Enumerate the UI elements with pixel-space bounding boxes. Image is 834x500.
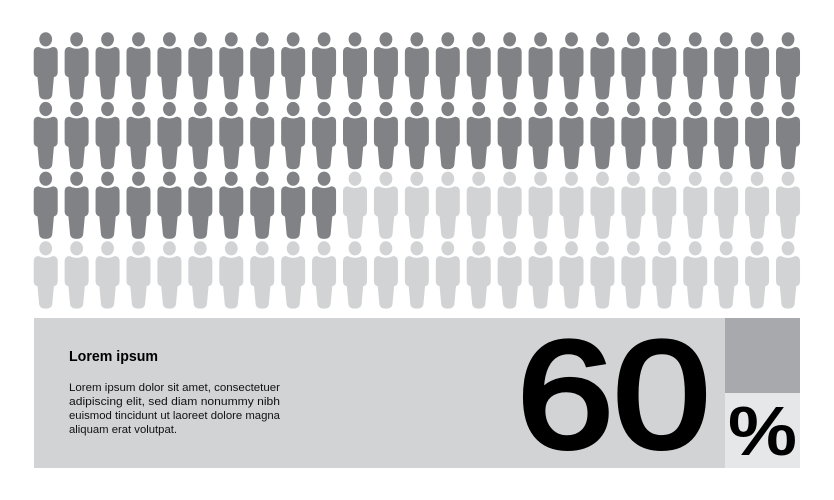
body text: adipiscing elit, sed diam nonummy nibh: [69, 396, 280, 408]
percent sign: %: [728, 392, 797, 470]
body text: Lorem ipsum dolor sit amet, consectetuer: [69, 382, 280, 394]
person row 2: dark: [34, 102, 800, 169]
panel: light square: [725, 393, 800, 468]
heading: Lorem ipsum: [69, 348, 158, 365]
body text: euismod tincidunt ut laoreet dolore magna: [69, 410, 281, 422]
person row 3: ten dark, fifteen light: [34, 172, 800, 239]
body text: aliquam erat volutpat.: [69, 424, 177, 436]
panel: dark square: [725, 318, 800, 393]
body text: [69, 382, 281, 436]
big number 60: 60: [517, 310, 710, 480]
panel: main background: [34, 318, 725, 468]
person row 4: light: [34, 241, 800, 309]
person row 1: dark: [34, 32, 800, 100]
